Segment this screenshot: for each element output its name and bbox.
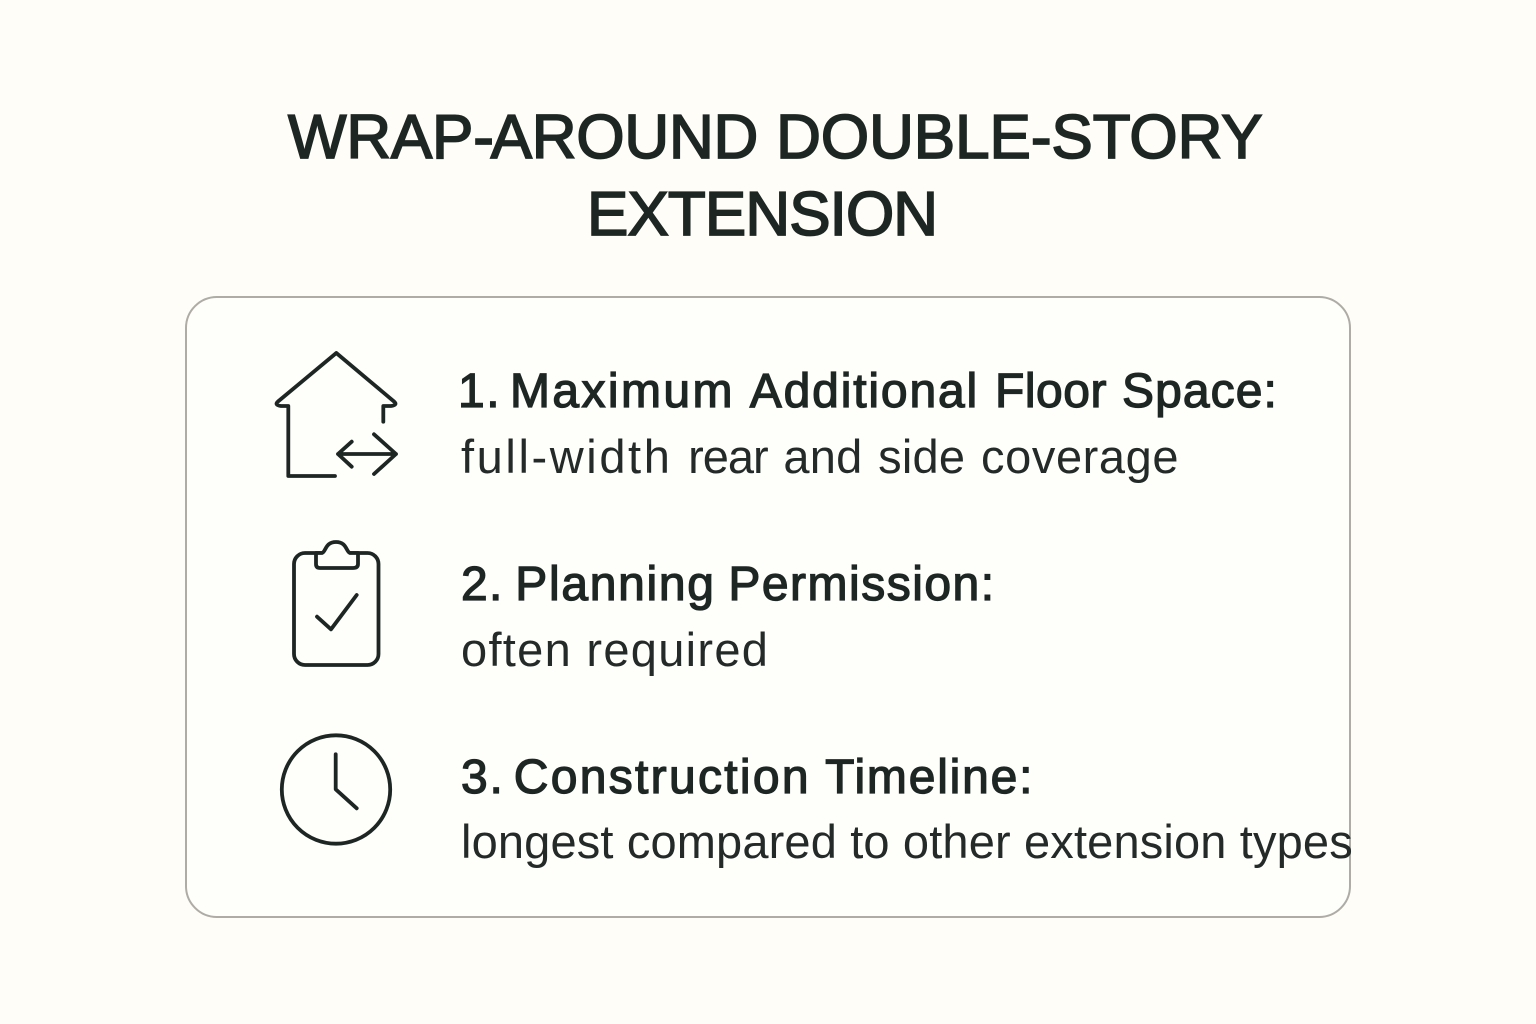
text: item 2 — [461, 558, 996, 676]
text: item 3 — [461, 750, 1353, 868]
title — [287, 103, 1263, 249]
icon: clock — [280, 733, 392, 846]
text: item 3: longest compared to other extension types — [461, 815, 1353, 868]
text: item 1: full-width rear and side coverage — [461, 430, 1179, 483]
icon: house with arrow — [274, 351, 398, 478]
text: item 3: 3. Construction Timeline: — [461, 750, 1034, 804]
title: WRAP-AROUND DOUBLE-STORY — [288, 103, 1263, 172]
panel: features card — [185, 296, 1351, 918]
text: item 1 — [458, 365, 1278, 483]
title: EXTENSION — [587, 180, 937, 249]
text: item 1: 1. Maximum Additional Floor Space: — [458, 365, 1278, 418]
text: item 2: 2. Planning Permission: — [461, 558, 996, 611]
icon: clipboard with check — [292, 540, 380, 667]
text: item 2: often required — [461, 623, 769, 676]
